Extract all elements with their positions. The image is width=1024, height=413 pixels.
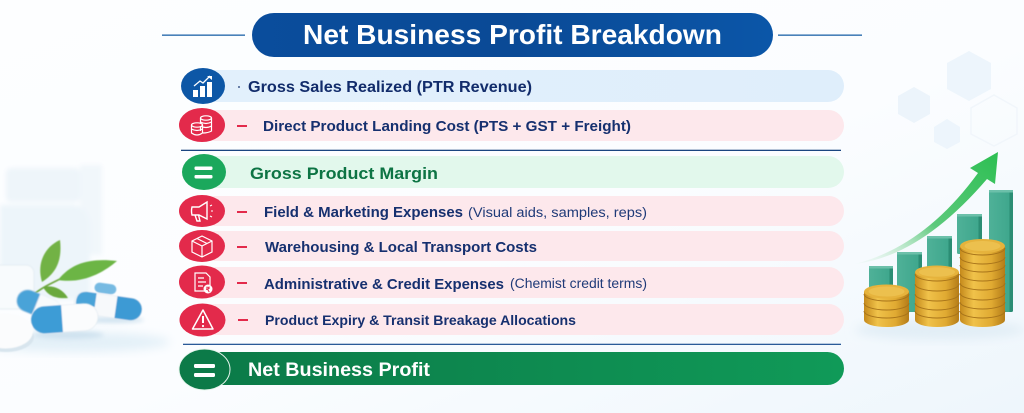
minus sign bbox=[237, 246, 247, 248]
icon: equals bbox=[182, 154, 226, 190]
minus sign bbox=[237, 282, 247, 284]
icon: megaphone bbox=[179, 195, 225, 227]
icon: rising bar chart bbox=[181, 68, 225, 104]
white blurred block bbox=[0, 265, 34, 309]
row: expiry and breakage: Product Expiry & Transit Breakage Allocations bbox=[265, 312, 576, 328]
row label bbox=[264, 204, 647, 221]
bottle bbox=[0, 165, 102, 300]
row label: (Visual aids, samples, reps) bbox=[468, 205, 647, 220]
icon: warning triangle bbox=[180, 304, 226, 336]
capsule shadows bbox=[32, 317, 144, 339]
row: warehousing and transport bbox=[179, 230, 844, 262]
coin stack medium bbox=[915, 266, 959, 327]
title: Net Business Profit Breakdown bbox=[303, 19, 722, 50]
row: direct product landing cost: Direct Product Landing Cost (PTS + GST + Freight) bbox=[263, 118, 631, 135]
row label: (Chemist credit terms) bbox=[510, 276, 647, 291]
illustration: pill bottle, capsules and leaves bbox=[0, 165, 170, 352]
icon: box bbox=[179, 230, 225, 262]
row: administrative and credit expenses bbox=[179, 266, 844, 298]
icon: invoice bbox=[179, 266, 225, 298]
row: gross sales bbox=[181, 68, 844, 104]
row: gross product margin: Gross Product Margin bbox=[250, 164, 438, 183]
minus sign bbox=[238, 319, 248, 321]
row label: Field & Marketing Expenses bbox=[264, 204, 463, 221]
row: direct product landing cost bbox=[179, 108, 844, 142]
tablet bbox=[0, 314, 34, 352]
capsule back left bbox=[13, 287, 64, 324]
row label: Administrative & Credit Expenses bbox=[264, 276, 504, 293]
capsule back right bbox=[73, 279, 145, 322]
floor glow bbox=[855, 320, 1024, 340]
row: gross sales: Gross Sales Realized (PTR Revenue) bbox=[248, 79, 532, 96]
row label bbox=[264, 276, 647, 293]
row: net business profit: Net Business Profit bbox=[248, 360, 431, 381]
icon: invoice: ₹ bbox=[206, 286, 211, 294]
coin stack tall bbox=[960, 239, 1005, 327]
green bars bbox=[869, 190, 1013, 312]
icon: equals bbox=[179, 349, 230, 390]
title bbox=[162, 13, 862, 57]
row: net business profit bbox=[179, 349, 844, 390]
chart illustration: bars, coins and growth arrow bbox=[855, 152, 1024, 340]
minus sign bbox=[237, 125, 247, 127]
icon: coins bbox=[179, 108, 225, 142]
capsule front bbox=[30, 303, 99, 334]
minus sign bbox=[237, 211, 247, 213]
row: field and marketing expenses bbox=[179, 195, 844, 227]
row: gross product margin bbox=[182, 154, 844, 190]
decorative hexagons bbox=[898, 51, 1017, 149]
row: warehousing and transport: Warehousing & Local Transport Costs bbox=[265, 239, 537, 256]
growth arrow bbox=[855, 152, 998, 264]
leaves bbox=[34, 240, 117, 298]
floor shadow bbox=[0, 332, 170, 352]
coin stack small bbox=[864, 284, 909, 327]
row: expiry and breakage bbox=[180, 304, 844, 336]
